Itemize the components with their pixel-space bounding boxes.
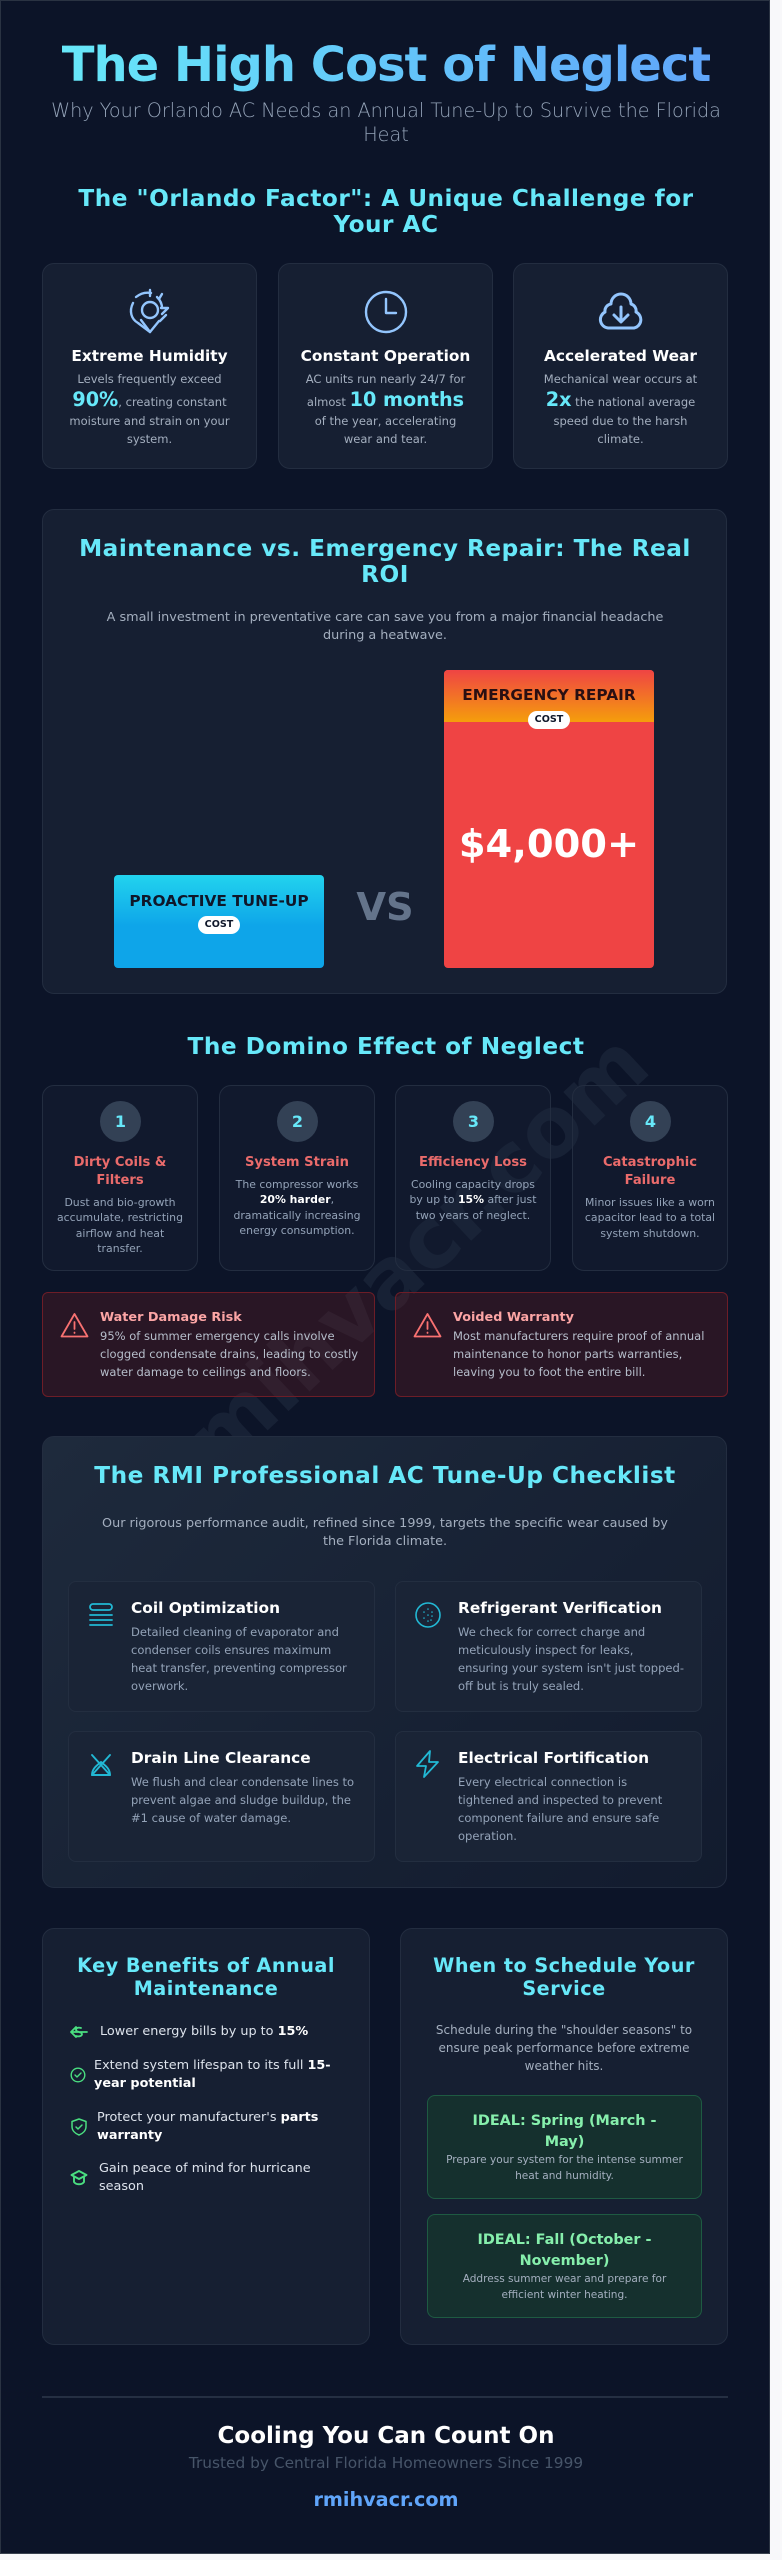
- bar label: EMERGENCY REPAIR: [462, 686, 636, 704]
- step text: capacitor lead to a total: [585, 1211, 715, 1224]
- heading: Orlando factor: The "Orlando Factor": A Unique Challenge for: [78, 185, 694, 212]
- season text: [428, 2153, 701, 2184]
- heading: Orlando factor: Your AC: [333, 211, 439, 238]
- intro text: during a heatwave.: [323, 628, 447, 643]
- item: drain line: [68, 1731, 375, 1862]
- callout text: [100, 1329, 358, 1379]
- card text: almost 10 months: [307, 388, 464, 411]
- item text: component failure and ensure safe: [458, 1811, 659, 1825]
- number: [453, 1101, 494, 1142]
- item text: overwork.: [131, 1679, 188, 1693]
- panel: extreme humidity: [42, 263, 257, 469]
- icon: energy: [70, 2026, 88, 2038]
- card text: system.: [127, 432, 172, 446]
- bar label: PROACTIVE TUNE-UP: [129, 892, 309, 910]
- season text: [428, 2272, 701, 2303]
- step 2: [219, 1085, 375, 1271]
- icon: warning: [414, 1313, 442, 1338]
- step text: The compressor works: [236, 1178, 358, 1191]
- heading: [401, 1954, 727, 2000]
- card text: Mechanical wear occurs at: [544, 372, 697, 386]
- item text: Every electrical connection is: [458, 1775, 627, 1789]
- intro text: [401, 2021, 727, 2075]
- panel: key benefits: [42, 1928, 370, 2345]
- item text: off but is truly sealed.: [458, 1679, 584, 1693]
- callout text: maintenance to honor parts warranties,: [453, 1347, 682, 1361]
- step title: [603, 1155, 697, 1188]
- benefit 1: [70, 2024, 308, 2039]
- intro text: ensure peak performance before extreme: [438, 2041, 690, 2055]
- season: fall: [427, 2214, 702, 2318]
- number: [100, 1101, 141, 1142]
- step text: Cooling capacity drops: [411, 1178, 535, 1191]
- card text: speed due to the harsh: [554, 414, 687, 428]
- heading: domino effect: The Domino Effect of Neglect: [188, 1033, 584, 1060]
- intro text: the Florida climate.: [323, 1534, 447, 1549]
- subtitle: Why Your Orlando AC Needs an Annual Tune-Up to Survive the Florida: [51, 99, 721, 122]
- step title: System Strain: [245, 1155, 349, 1170]
- step text: [410, 1178, 536, 1222]
- icon: warning: [60, 1313, 88, 1338]
- heading: Maintenance vs. Emergency Repair: The Real: [79, 535, 691, 562]
- step 3: [395, 1085, 551, 1271]
- step text: Minor issues like a worn: [585, 1196, 715, 1209]
- benefit text: Lower energy bills by up to 15%: [100, 2024, 308, 2039]
- title: The High Cost of Neglect: [62, 37, 710, 93]
- card title: Accelerated Wear: [544, 347, 697, 365]
- intro text: A small investment in preventative care can save you from a major financial headache: [107, 610, 663, 625]
- benefit text: [99, 2160, 311, 2196]
- heading: ROI: [361, 561, 409, 588]
- season text: efficient winter heating.: [501, 2288, 628, 2300]
- step title: Efficiency Loss: [419, 1155, 527, 1170]
- icon: coil: [89, 1603, 113, 1626]
- panel: maintenance vs emergency: [42, 509, 727, 994]
- item title: Electrical Fortification: [458, 1749, 649, 1767]
- icon: bolt: [416, 1750, 439, 1778]
- step text: transfer.: [97, 1242, 143, 1255]
- item text: [458, 1775, 662, 1843]
- panel: accelerated wear: [513, 263, 728, 469]
- cost pill: [528, 711, 570, 729]
- callout text: 95% of summer emergency calls involve: [100, 1329, 335, 1343]
- number: 4: [645, 1112, 656, 1131]
- step text: [57, 1196, 183, 1255]
- callout text: clogged condensate drains, leading to costly: [100, 1347, 358, 1361]
- vs label: VS: [356, 885, 414, 930]
- step text: by up to 15% after just: [410, 1193, 536, 1206]
- icon: shield: [71, 2118, 87, 2136]
- item text: #1 cause of water damage.: [131, 1811, 291, 1825]
- icon: drain: [91, 1754, 111, 1776]
- heading: [77, 1954, 335, 2000]
- benefit 4: [70, 2160, 360, 2196]
- footer link: rmihvacr.com: [313, 2488, 459, 2511]
- season title: November): [520, 2252, 609, 2268]
- item title: Coil Optimization: [131, 1599, 280, 1617]
- item text: [131, 1625, 347, 1693]
- card title: Extreme Humidity: [71, 347, 228, 365]
- icon: check circle: [70, 2068, 86, 2082]
- bar: emergency repair: [444, 670, 654, 968]
- step text: dramatically increasing: [233, 1209, 361, 1222]
- benefit text: [94, 2058, 331, 2091]
- benefit text: [97, 2110, 318, 2143]
- step text: system shutdown.: [600, 1227, 700, 1240]
- heading: The RMI Professional AC Tune-Up Checklist: [94, 1462, 676, 1489]
- heading: Orlando factor: [78, 185, 694, 238]
- cost figure: $4,000+: [459, 822, 639, 867]
- step text: [585, 1196, 715, 1240]
- callout text: leaving you to foot the entire bill.: [453, 1365, 645, 1379]
- item text: Detailed cleaning of evaporator and: [131, 1625, 339, 1639]
- card text: AC units run nearly 24/7 for: [306, 372, 465, 386]
- season title: [428, 2230, 701, 2271]
- benefit text: year potential: [94, 2076, 196, 2091]
- card text: moisture and strain on your: [69, 414, 230, 428]
- item text: We check for correct charge and: [458, 1625, 645, 1639]
- item text: We flush and clear condensate lines to: [131, 1775, 354, 1789]
- icon: graduation cap: [70, 2169, 88, 2187]
- callout title: Voided Warranty: [453, 1310, 574, 1325]
- benefit text: season: [99, 2179, 144, 2194]
- number: [277, 1101, 318, 1142]
- item text: operation.: [458, 1829, 517, 1843]
- intro text: [102, 1516, 668, 1549]
- step text: energy consumption.: [239, 1224, 355, 1237]
- benefit text: Protect your manufacturer's parts: [97, 2110, 318, 2125]
- item text: [131, 1775, 354, 1825]
- step title: Dirty Coils &: [74, 1155, 166, 1170]
- card text: [306, 372, 466, 446]
- icon: cloud download: [598, 292, 642, 330]
- footer title: Cooling You Can Count On: [218, 2423, 554, 2449]
- panel: when to schedule: [400, 1928, 728, 2345]
- item text: meticulously inspect for leaks,: [458, 1643, 633, 1657]
- subtitle: Heat: [363, 122, 409, 146]
- cost pill: [198, 916, 240, 934]
- heading: Maintenance: [134, 1977, 278, 2000]
- season title: IDEAL: Spring (March -: [473, 2113, 656, 2129]
- step 4: [572, 1085, 728, 1271]
- card text: [69, 372, 230, 446]
- heading: When to Schedule Your: [433, 1954, 695, 1977]
- number: [630, 1101, 671, 1142]
- item text: [458, 1625, 684, 1693]
- item title: Drain Line Clearance: [131, 1749, 311, 1767]
- number: 1: [115, 1112, 126, 1131]
- step text: airflow and heat: [76, 1227, 164, 1240]
- card title: Constant Operation: [301, 347, 470, 365]
- card text: climate.: [597, 432, 644, 446]
- step title: Filters: [96, 1173, 144, 1188]
- benefit 2: [70, 2058, 331, 2091]
- item: refrigerant verification: [395, 1581, 702, 1712]
- item text: ensuring your system isn't just topped-: [458, 1661, 684, 1675]
- card text: wear and tear.: [344, 432, 427, 446]
- number: 2: [292, 1112, 303, 1131]
- panel: constant operation: [278, 263, 493, 469]
- season title: May): [545, 2134, 584, 2150]
- card text: of the year, accelerating: [315, 414, 456, 428]
- callout title: Water Damage Risk: [100, 1310, 242, 1325]
- season title: IDEAL: Fall (October -: [477, 2232, 652, 2248]
- season text: Address summer wear and prepare for: [463, 2273, 666, 2285]
- heading: Key Benefits of Annual: [77, 1954, 335, 1977]
- callout: voided warranty: [395, 1292, 728, 1397]
- header band: [444, 670, 654, 722]
- panel: checklist: [42, 1436, 727, 1888]
- subtitle: [51, 99, 721, 146]
- watermark: rmihvacr.com: [136, 1014, 667, 1518]
- step title: Failure: [625, 1173, 675, 1188]
- step text: 20% harder,: [260, 1193, 334, 1206]
- step text: accumulate, restricting: [57, 1211, 183, 1224]
- callout: water damage: [42, 1292, 375, 1397]
- season title: [428, 2111, 701, 2152]
- heading: Service: [522, 1977, 606, 2000]
- season text: Prepare your system for the intense summer: [446, 2154, 683, 2166]
- benefit 3: [71, 2110, 318, 2143]
- intro text: [106, 610, 663, 643]
- season: spring: [427, 2095, 702, 2199]
- intro text: Schedule during the "shoulder seasons" to: [436, 2023, 692, 2037]
- callout text: water damage to ceilings and floors.: [100, 1365, 311, 1379]
- card text: Levels frequently exceed: [77, 372, 222, 386]
- cost pill: COST: [535, 714, 563, 725]
- item title: Refrigerant Verification: [458, 1599, 662, 1617]
- benefit text: Gain peace of mind for hurricane: [99, 2161, 311, 2176]
- cost pill: COST: [205, 919, 233, 930]
- intro text: weather hits.: [525, 2059, 603, 2073]
- item text: tightened and inspected to prevent: [458, 1793, 662, 1807]
- step text: Dust and bio-growth: [64, 1196, 176, 1209]
- callout text: [453, 1329, 704, 1379]
- icon: clock: [364, 290, 408, 334]
- item text: prevent algae and sludge buildup, the: [131, 1793, 351, 1807]
- item text: heat transfer, preventing compressor: [131, 1661, 347, 1675]
- season text: heat and humidity.: [515, 2170, 614, 2182]
- step title: [74, 1155, 166, 1188]
- intro text: Our rigorous performance audit, refined since 1999, targets the specific wear caused by: [102, 1516, 668, 1531]
- number: 3: [468, 1112, 479, 1131]
- bar: proactive tune-up: [114, 875, 324, 968]
- step 1: [42, 1085, 198, 1271]
- item: electrical: [395, 1731, 702, 1862]
- card text: [544, 372, 697, 446]
- step title: Catastrophic: [603, 1155, 697, 1170]
- benefit text: warranty: [97, 2128, 162, 2143]
- icon: refrigerant: [415, 1602, 441, 1628]
- footer tagline: Trusted by Central Florida Homeowners Since 1999: [189, 2454, 583, 2472]
- callout text: Most manufacturers require proof of annual: [453, 1329, 704, 1343]
- card text: 2x the national average: [546, 388, 695, 411]
- item text: condenser coils ensures maximum: [131, 1643, 331, 1657]
- benefit text: Extend system lifespan to its full 15-: [94, 2058, 331, 2073]
- item: coil optimization: [68, 1581, 375, 1712]
- card text: 90%, creating constant: [72, 388, 227, 411]
- heading: [79, 535, 691, 588]
- step text: two years of neglect.: [416, 1209, 530, 1222]
- icon: humidity: [130, 288, 170, 334]
- step text: [233, 1178, 361, 1237]
